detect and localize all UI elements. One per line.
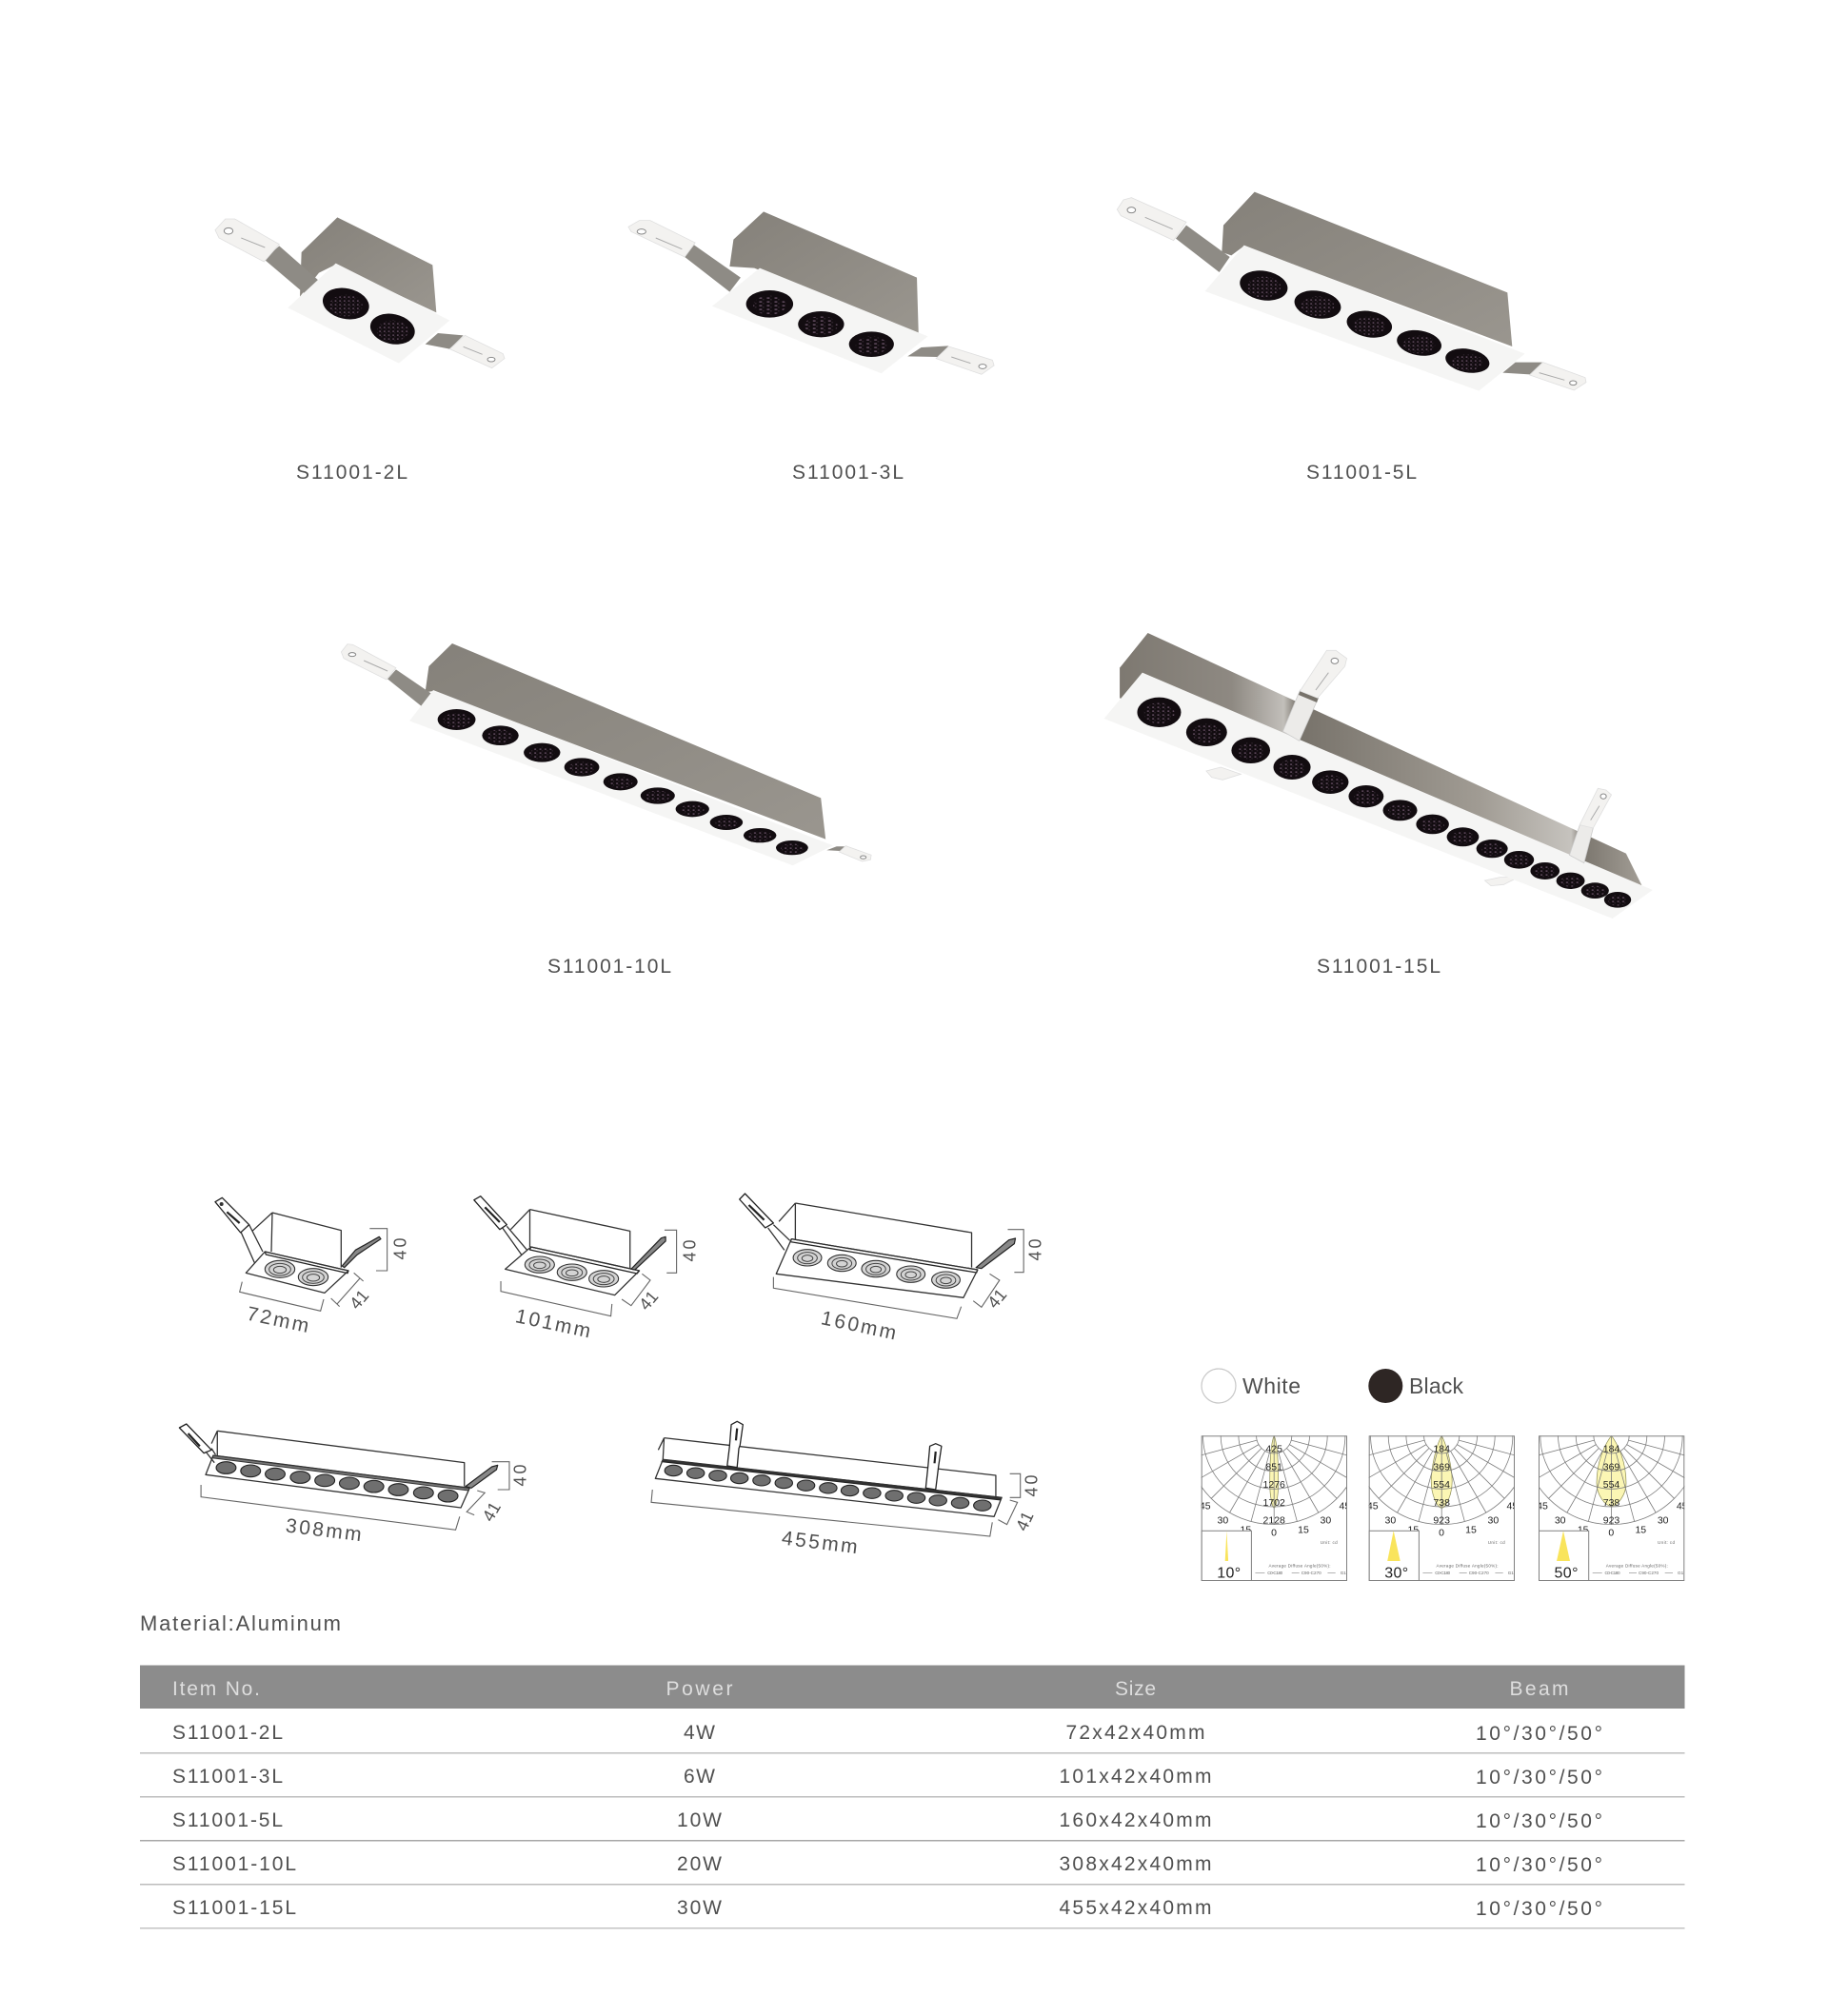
polar chart: 10 degree beam: 15 — [1241, 1524, 1251, 1535]
dimension: height 40: 40 — [680, 1239, 699, 1262]
polar chart: 10 degree beam: 1702 — [1263, 1497, 1285, 1509]
polar chart: 50 degree beam: 554 — [1603, 1479, 1619, 1491]
dimension: height 40: 40 — [510, 1464, 529, 1487]
polar chart: 30 degree beam: 15 — [1465, 1524, 1477, 1535]
dimension: height 40: 40 — [1022, 1475, 1041, 1496]
row: S11001-15L: 10°/30°/50° — [1476, 1898, 1602, 1920]
polar chart: 10 degree beam: 30 — [1218, 1514, 1228, 1526]
polar chart: 10 degree beam: 425 — [1265, 1443, 1282, 1454]
polar chart: 30 degree beam: C90-C270 — [1469, 1571, 1489, 1575]
row: S11001-5L: 10W — [677, 1809, 722, 1831]
row: S11001-5L: 10°/30°/50° — [1476, 1810, 1602, 1832]
dimension drawing: 72mm — [215, 1197, 409, 1337]
polar chart: 10 degree beam: 30 — [1321, 1514, 1331, 1526]
polar chart: 30 degree beam: 554 — [1433, 1479, 1450, 1491]
table header: Size — [1115, 1678, 1156, 1700]
polar chart: 10 degree beam: C90-C270 — [1301, 1571, 1321, 1575]
row: S11001-5L: S11001-5L — [172, 1809, 283, 1831]
label: S11001-3L: S11001-3L — [792, 462, 904, 484]
dimension: depth 41: 41 — [479, 1498, 505, 1525]
row: S11001-2L: 72x42x40mm — [1066, 1722, 1205, 1744]
polar chart: 50 degree beam: 0 — [1608, 1527, 1614, 1538]
polar chart: 30 degree beam: 184 — [1433, 1443, 1450, 1454]
polar chart: 10 degree beam — [1202, 1435, 1347, 1581]
polar chart: 30 degree beam: 45 — [1507, 1500, 1518, 1512]
row: S11001-15L: S11001-15L — [172, 1897, 296, 1919]
polar chart: 30 degree beam: 30° — [1384, 1566, 1408, 1582]
product photo: S11001-3L — [628, 211, 994, 374]
row: S11001-10L: 10°/30°/50° — [1476, 1854, 1602, 1876]
table header: Beam — [1510, 1678, 1569, 1700]
dimension: width 72mm: 72mm — [245, 1303, 310, 1337]
dimension drawing: 101mm — [474, 1196, 699, 1342]
row: S11001-10L: 20W — [677, 1853, 722, 1875]
row: S11001-5L — [140, 1809, 1685, 1841]
polar chart: 10 degree beam: 851 — [1265, 1461, 1282, 1472]
polar chart: 10 degree beam: 1276 — [1263, 1479, 1285, 1491]
colour swatch: Black — [1368, 1369, 1464, 1403]
label: S11001-15L: S11001-15L — [1317, 956, 1441, 978]
colour swatch: White: White — [1242, 1374, 1301, 1398]
row: S11001-3L: 10°/30°/50° — [1476, 1767, 1602, 1789]
label: S11001-5L: S11001-5L — [1306, 462, 1417, 484]
polar chart: 50 degree beam: 923 — [1603, 1514, 1619, 1526]
row: S11001-2L: 10°/30°/50° — [1476, 1723, 1602, 1745]
product photo: S11001-10L — [341, 643, 871, 865]
table header: Power — [666, 1678, 733, 1700]
product photo: S11001-15L — [1104, 633, 1653, 919]
dimension: height 40: 40 — [390, 1237, 409, 1260]
colour swatch: White — [1202, 1369, 1301, 1403]
row: S11001-5L: 160x42x40mm — [1059, 1809, 1211, 1831]
polar chart: 50 degree beam: Average Diffuse Angle(50%): — [1606, 1563, 1668, 1568]
polar chart: 30 degree beam: 0 — [1439, 1527, 1444, 1538]
row: S11001-10L — [140, 1853, 1685, 1885]
colour swatch: Black: Black — [1409, 1374, 1464, 1398]
row: S11001-15L: 30W — [677, 1897, 722, 1919]
polar chart: 30 degree beam: 369 — [1433, 1461, 1450, 1472]
polar chart: 30 degree beam: 923 — [1433, 1514, 1450, 1526]
polar chart: 50 degree beam: C90-C270 — [1639, 1571, 1659, 1575]
polar chart: 10 degree beam: G1 — [1341, 1571, 1346, 1575]
row: S11001-10L: S11001-10L — [172, 1853, 296, 1875]
polar chart: 30 degree beam: Unit: cd — [1488, 1540, 1505, 1545]
polar chart: 30 degree beam: C0-C180 — [1435, 1571, 1451, 1575]
product photo: S11001-2L — [215, 217, 505, 368]
dimension: depth 41: 41 — [635, 1287, 662, 1314]
row: S11001-2L: 4W — [684, 1722, 715, 1744]
row: S11001-3L: S11001-3L — [172, 1766, 283, 1788]
polar chart: 30 degree beam: G1 — [1508, 1571, 1514, 1575]
row: S11001-3L: 6W — [684, 1766, 715, 1788]
product photo: S11001-5L — [1117, 192, 1586, 391]
dimension: height 40: 40 — [1025, 1239, 1044, 1260]
table header — [140, 1666, 1685, 1709]
dimension: width 308mm: 308mm — [285, 1515, 363, 1546]
polar chart: 30 degree beam — [1369, 1435, 1515, 1581]
polar chart: 30 degree beam: 45 — [1367, 1500, 1379, 1512]
row: S11001-10L: 308x42x40mm — [1059, 1853, 1211, 1875]
polar chart: 10 degree beam: 10° — [1217, 1566, 1241, 1582]
label: S11001-2L: S11001-2L — [296, 462, 407, 484]
polar chart: 10 degree beam: 45 — [1340, 1500, 1350, 1512]
polar chart: 10 degree beam: Average Diffuse Angle(50%): — [1268, 1563, 1330, 1568]
label: S11001-10L: S11001-10L — [547, 956, 671, 978]
polar chart: 30 degree beam: 738 — [1433, 1497, 1450, 1509]
polar chart: 10 degree beam: 45 — [1200, 1500, 1211, 1512]
polar chart: 30 degree beam: 15 — [1408, 1524, 1419, 1535]
polar chart: 10 degree beam: Unit: cd — [1321, 1540, 1338, 1545]
row: S11001-15L: 455x42x40mm — [1059, 1897, 1211, 1919]
row: S11001-3L — [140, 1766, 1685, 1797]
polar chart: 50 degree beam: 45 — [1677, 1500, 1688, 1512]
polar chart: 50 degree beam: 45 — [1537, 1500, 1548, 1512]
dimension: width 455mm: 455mm — [781, 1528, 859, 1558]
specification table — [140, 1666, 1685, 1928]
polar chart: 10 degree beam: C0-C180 — [1267, 1571, 1283, 1575]
polar chart: 50 degree beam: G1 — [1678, 1571, 1684, 1575]
dimension drawing: 160mm — [740, 1194, 1044, 1344]
material note: Material:Aluminum — [140, 1611, 341, 1635]
polar chart: 50 degree beam: 15 — [1635, 1524, 1646, 1535]
polar chart: 50 degree beam: 369 — [1603, 1461, 1619, 1472]
polar chart: 10 degree beam: 2128 — [1263, 1514, 1285, 1526]
polar chart: 50 degree beam: 738 — [1603, 1497, 1619, 1509]
row: S11001-2L: S11001-2L — [172, 1722, 283, 1744]
polar chart: 30 degree beam: 30 — [1385, 1514, 1396, 1526]
table header: Item No. — [172, 1678, 260, 1700]
polar chart: 50 degree beam: Unit: cd — [1658, 1540, 1675, 1545]
polar chart: 30 degree beam: Average Diffuse Angle(50%): — [1436, 1563, 1498, 1568]
dimension drawing: 308mm — [179, 1424, 529, 1546]
polar chart: 30 degree beam: 30 — [1488, 1514, 1499, 1526]
row: S11001-2L — [140, 1722, 1685, 1753]
dimension: width 101mm: 101mm — [513, 1305, 592, 1342]
polar chart: 50 degree beam: 184 — [1603, 1443, 1619, 1454]
polar chart: 50 degree beam: C0-C180 — [1605, 1571, 1620, 1575]
dimension: width 160mm: 160mm — [819, 1307, 898, 1344]
polar chart: 50 degree beam — [1539, 1435, 1685, 1581]
dimension drawing: 455mm — [651, 1421, 1041, 1558]
polar chart: 10 degree beam: 15 — [1298, 1524, 1309, 1535]
dimension: depth 41: 41 — [1012, 1509, 1038, 1533]
polar chart: 50 degree beam: 50° — [1554, 1566, 1579, 1582]
row: S11001-15L — [140, 1897, 1685, 1928]
dimension: depth 41: 41 — [346, 1286, 372, 1313]
polar chart: 50 degree beam: 15 — [1578, 1524, 1589, 1535]
dimension: depth 41: 41 — [984, 1285, 1010, 1312]
polar chart: 50 degree beam: 30 — [1555, 1514, 1566, 1526]
polar chart: 10 degree beam: 0 — [1271, 1527, 1277, 1538]
row: S11001-3L: 101x42x40mm — [1059, 1766, 1211, 1788]
polar chart: 50 degree beam: 30 — [1658, 1514, 1669, 1526]
